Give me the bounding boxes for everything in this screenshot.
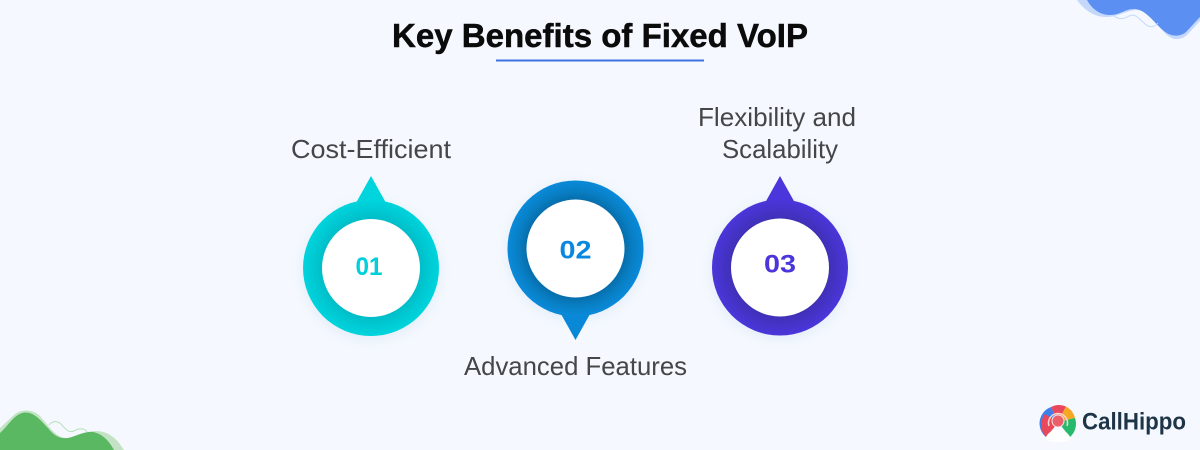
label: Cost-Efficient: Cost-Efficient <box>291 134 452 164</box>
badge 02 <box>508 180 644 340</box>
badge 02: 02 <box>560 236 592 264</box>
title: Key Benefits of Fixed VoIP <box>392 17 808 54</box>
label: Advanced Features: Advanced Features <box>464 351 687 381</box>
logo wordmark: CallHippo <box>1082 408 1186 436</box>
logo: CallHippo <box>1040 405 1186 442</box>
label: Flexibility and Scalability <box>698 102 856 164</box>
badge 01: 01 <box>356 253 383 281</box>
icon: CallHippo mark <box>1040 405 1076 442</box>
decoration: top-right blue wave <box>1077 0 1200 39</box>
badge 03 <box>712 176 848 338</box>
label: Flexibility and Scalability: Flexibility and <box>698 102 856 132</box>
decoration: bottom-left green wave <box>0 410 124 450</box>
badge 03: 03 <box>764 250 796 278</box>
label: Flexibility and Scalability: Scalability <box>722 134 838 164</box>
title underline <box>496 60 704 62</box>
badge 01 <box>303 176 439 339</box>
